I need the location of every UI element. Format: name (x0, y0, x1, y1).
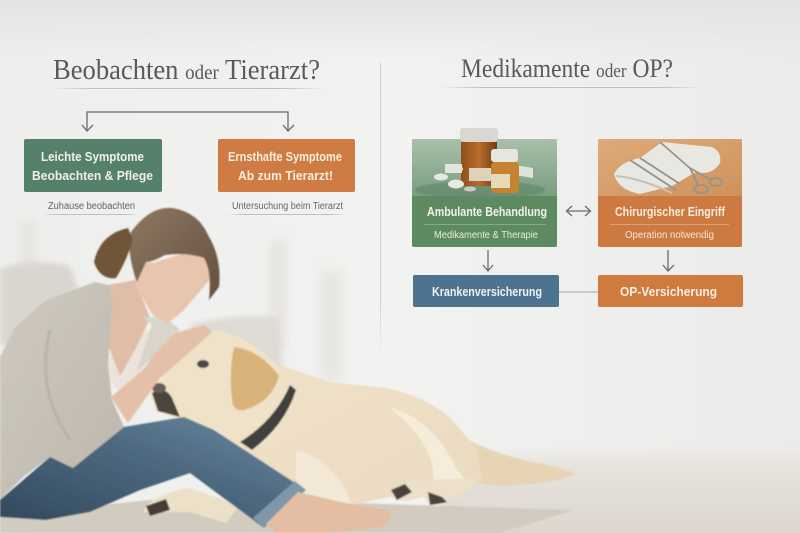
dog (143, 330, 575, 523)
arrow: split to both symptom boxes (82, 112, 294, 131)
woman foot (266, 492, 392, 533)
panel: Chirurgischer Eingriff (598, 139, 742, 247)
box: Leichte Symptome: Beobachten & Pflege (32, 168, 153, 183)
box: Leichte Symptome (24, 139, 162, 192)
box: Ernsthafte Symptome: Ab zum Tierarzt! (238, 168, 333, 183)
dog paws (390, 478, 478, 504)
woman (0, 208, 392, 533)
connector line between insurances (558, 291, 599, 293)
dog front leg (296, 450, 352, 505)
dog ear (231, 347, 279, 410)
image: medicine bottles (412, 128, 557, 199)
heading: Beobachten oder Tierarzt?: Beobachten oder Tierarzt? (53, 55, 320, 86)
woman ponytail (94, 228, 133, 278)
box: Ernsthafte Symptome (218, 139, 355, 192)
woman hair (129, 208, 220, 300)
arrow: double between treatments (566, 206, 590, 216)
caption: Untersuchung beim Tierarzt: Untersuchung beim Tierarzt (232, 201, 343, 212)
caption: Zuhause beobachten: Zuhause beobachten (48, 201, 135, 212)
panel: Ambulante Behandlung: Ambulante Behandlung (427, 205, 547, 219)
dog collar (240, 385, 296, 450)
dog head (150, 330, 292, 448)
panel divider (380, 63, 381, 360)
panel: Ambulante Behandlung: Medikamente & Therapie (434, 230, 538, 241)
dog body (225, 365, 482, 505)
box: Krankenversicherung: Krankenversicherung (432, 284, 542, 299)
arrow: down to Krankenversicherung (483, 250, 493, 271)
woman jeans (0, 417, 306, 528)
box: Leichte Symptome: Leichte Symptome (41, 149, 144, 164)
heading: Medikamente oder OP?: Medikamente oder OP? (461, 54, 673, 83)
arrow: down to OP-Versicherung (663, 250, 674, 271)
box: OP-Versicherung (598, 275, 743, 307)
photo: woman cuddling labrador on a rug (0, 208, 575, 533)
box: Krankenversicherung (413, 275, 559, 307)
woman sweater (0, 282, 124, 500)
panel: Chirurgischer Eingriff: Operation notwendig (625, 230, 714, 241)
rug (0, 500, 574, 533)
woman face (134, 253, 212, 323)
sofa (0, 262, 284, 385)
woman forearm and hand (111, 325, 212, 423)
woman top under the sweater (103, 330, 172, 392)
panel: Chirurgischer Eingriff: Chirurgischer Eingriff (615, 205, 726, 219)
box: OP-Versicherung: OP-Versicherung (620, 284, 717, 299)
woman neck and chest (108, 280, 150, 376)
box: Ernsthafte Symptome: Ernsthafte Symptome (228, 149, 342, 164)
dog tail (465, 438, 575, 486)
panel: Ambulante Behandlung (412, 128, 557, 247)
image: gauze and surgical scissors (598, 139, 742, 196)
